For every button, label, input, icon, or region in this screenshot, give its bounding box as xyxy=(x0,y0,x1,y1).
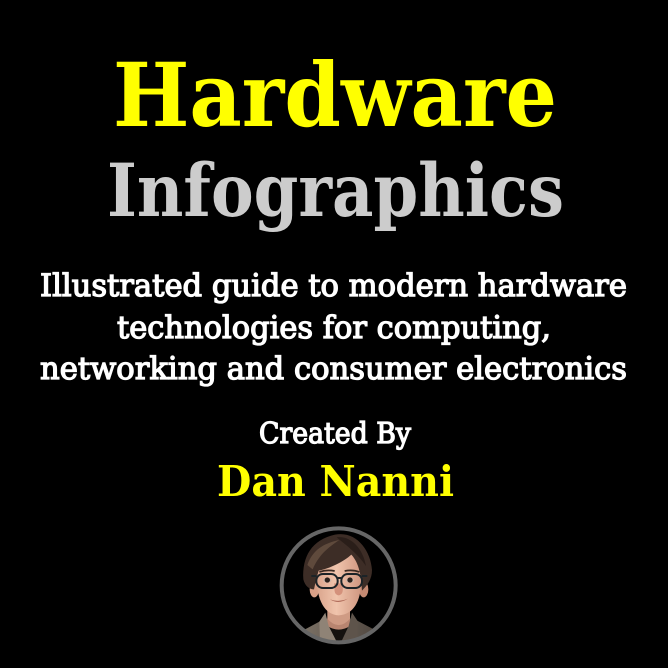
title: Hardware: Hardware xyxy=(113,43,557,147)
subtitle: Illustrated guide to modern hardware xyxy=(40,268,627,304)
subtitle: technologies for computing, xyxy=(117,310,551,346)
created by label: Created By xyxy=(259,416,412,450)
subtitle: networking and consumer electronics xyxy=(40,351,627,387)
cover panel xyxy=(40,59,626,644)
icon: author avatar xyxy=(282,528,396,647)
title: Infographics: Infographics xyxy=(107,148,564,234)
author name: Dan Nanni xyxy=(217,457,454,507)
subtitle xyxy=(40,268,627,387)
